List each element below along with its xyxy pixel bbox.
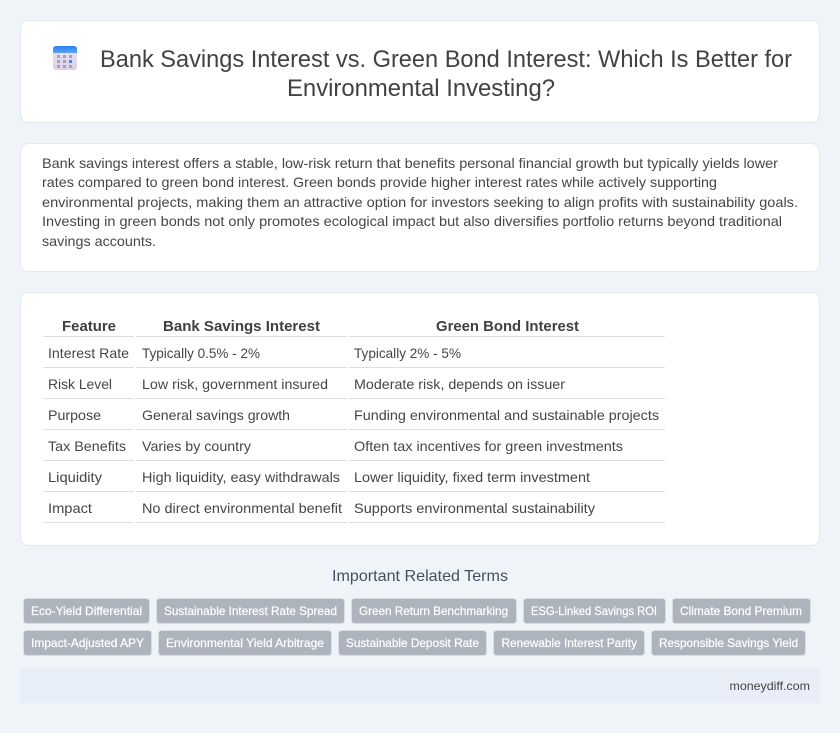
title: Bank Savings Interest vs. Green Bond Interest: Which Is Better for [100, 46, 792, 73]
panel: summary paragraph [20, 144, 820, 272]
tag: Eco-Yield Differential [31, 604, 142, 618]
icon: calendar [53, 46, 77, 70]
tag: Sustainable Interest Rate Spread [164, 604, 337, 618]
table row: liquidity: Lower liquidity, fixed term investment [354, 469, 590, 485]
text block: summary: Bank savings interest offers a stable, low-risk return that benefits personal financial growth but typically yields lower [42, 155, 778, 171]
tag: Environmental Yield Arbitrage [166, 636, 324, 650]
tag: Responsible Savings Yield [659, 636, 798, 650]
table row: interest rate: Interest Rate [48, 345, 129, 361]
table row: liquidity [43, 469, 665, 492]
table row: interest rate: Typically 0.5% - 2% [142, 345, 260, 361]
table row: interest rate: Typically 2% - 5% [354, 345, 461, 361]
tag: Impact-Adjusted APY [31, 636, 144, 650]
table row: purpose: Purpose [48, 407, 101, 423]
table row: purpose: Funding environmental and sustainable projects [354, 407, 659, 423]
tag [652, 630, 806, 656]
tag [352, 598, 516, 624]
table row: interest rate [43, 345, 665, 368]
tag list: related terms [24, 598, 810, 656]
table header row: Feature [62, 318, 116, 335]
table row: tax benefits: Tax Benefits [48, 438, 126, 454]
tag [524, 598, 666, 624]
panel: title header [20, 20, 820, 122]
table row: purpose: General savings growth [142, 407, 290, 423]
tag [24, 598, 150, 624]
text block: summary [42, 155, 798, 249]
tag [158, 630, 332, 656]
tag [156, 598, 344, 624]
footer: moneydiff.com [730, 679, 810, 693]
table row: liquidity: Liquidity [48, 469, 102, 485]
table row: risk level: Risk Level [48, 376, 112, 392]
table row: impact [43, 500, 665, 523]
table header row: Green Bond Interest [436, 318, 579, 335]
tag: Green Return Benchmarking [359, 604, 508, 618]
text block: summary: environmental projects, making them an attractive option for investors seeking to align profits with sustainability goals. [42, 194, 798, 210]
tag: Sustainable Deposit Rate [346, 636, 479, 650]
table header row [43, 318, 665, 337]
table header row: Bank Savings Interest [163, 318, 320, 335]
tag: Renewable Interest Parity [502, 636, 637, 650]
panel: comparison table [20, 292, 820, 546]
table row: risk level [43, 376, 665, 399]
table row: tax benefits: Varies by country [142, 438, 251, 454]
table row: impact: Supports environmental sustainability [354, 500, 595, 516]
table row: purpose [43, 407, 665, 430]
text block: summary: savings accounts. [42, 233, 156, 249]
title: Environmental Investing? [287, 75, 555, 102]
tag: Climate Bond Premium [680, 604, 802, 618]
tag: ESG-Linked Savings ROI [531, 604, 657, 618]
table row: liquidity: High liquidity, easy withdrawals [142, 469, 340, 485]
tag [672, 598, 810, 624]
table row: impact: Impact [48, 500, 92, 516]
tag [24, 630, 152, 656]
table row: risk level: Low risk, government insured [142, 376, 328, 392]
tag [338, 630, 486, 656]
table row: risk level: Moderate risk, depends on issuer [354, 376, 565, 392]
table row: tax benefits [43, 438, 665, 461]
title [100, 46, 792, 102]
text block: summary: rates compared to green bond interest. Green bonds provide higher interest rates while actively supporting [42, 174, 717, 190]
text block: summary: Investing in green bonds not only promotes ecological impact but also diversifies portfolio returns beyond traditional [42, 213, 782, 229]
table row: tax benefits: Often tax incentives for green investments [354, 438, 623, 454]
tag [494, 630, 644, 656]
table row: impact: No direct environmental benefit [142, 500, 342, 516]
heading: related terms: Important Related Terms [332, 568, 508, 585]
footer [20, 669, 820, 703]
